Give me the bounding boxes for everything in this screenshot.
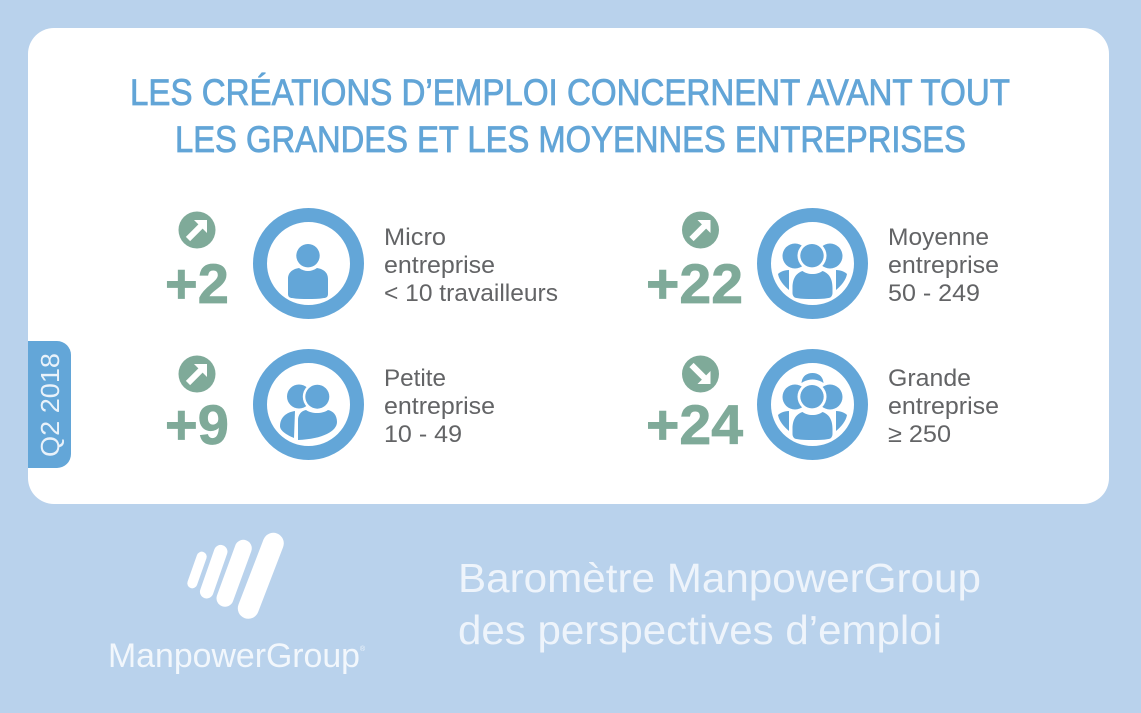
label <box>384 365 495 448</box>
icon: arrow up <box>178 356 216 392</box>
title <box>130 72 1010 160</box>
footer text: Baromètre ManpowerGroup <box>458 555 981 601</box>
footer text: des perspectives d’emploi <box>458 607 942 653</box>
label: Moyenne <box>888 224 989 251</box>
item: moyenne entreprise <box>646 212 999 315</box>
item: petite entreprise <box>165 356 495 456</box>
tab: period: Q2 2018 <box>35 353 65 457</box>
logo: ManpowerGroup <box>108 543 366 675</box>
icon: logo bars <box>192 543 273 608</box>
item: grande entreprise <box>646 356 999 456</box>
panel: white card <box>28 28 1109 504</box>
value: +9 <box>165 393 229 456</box>
value: +2 <box>165 252 229 315</box>
icon: large group of people <box>764 356 861 453</box>
label: < 10 travailleurs <box>384 280 558 307</box>
label: entreprise <box>384 252 495 279</box>
label: Micro <box>384 224 446 251</box>
icon: one person <box>260 215 357 312</box>
title: LES CRÉATIONS D’EMPLOI CONCERNENT AVANT TOUT <box>130 72 1010 113</box>
value: +24 <box>646 393 743 456</box>
label: Petite <box>384 365 446 392</box>
title: LES GRANDES ET LES MOYENNES ENTREPRISES <box>175 119 966 160</box>
tab: period <box>28 341 71 468</box>
value: +22 <box>646 252 743 315</box>
icon: two people <box>260 356 357 453</box>
label: 50 - 249 <box>888 280 980 307</box>
item: micro entreprise <box>165 212 558 315</box>
label <box>384 224 558 307</box>
label: entreprise <box>888 252 999 279</box>
footer text <box>458 555 981 653</box>
icon: arrow up <box>682 212 719 248</box>
icon: arrow up <box>178 212 216 248</box>
label <box>888 224 999 307</box>
icon: arrow down <box>682 356 719 392</box>
label: Grande <box>888 365 971 392</box>
label <box>888 365 999 448</box>
registered mark: ® <box>360 645 366 653</box>
logo wordmark: ManpowerGroup <box>108 637 360 675</box>
label: entreprise <box>888 393 999 420</box>
label: entreprise <box>384 393 495 420</box>
label: 10 - 49 <box>384 421 462 448</box>
icon: group of people <box>764 215 861 312</box>
label: ≥ 250 <box>888 421 951 448</box>
